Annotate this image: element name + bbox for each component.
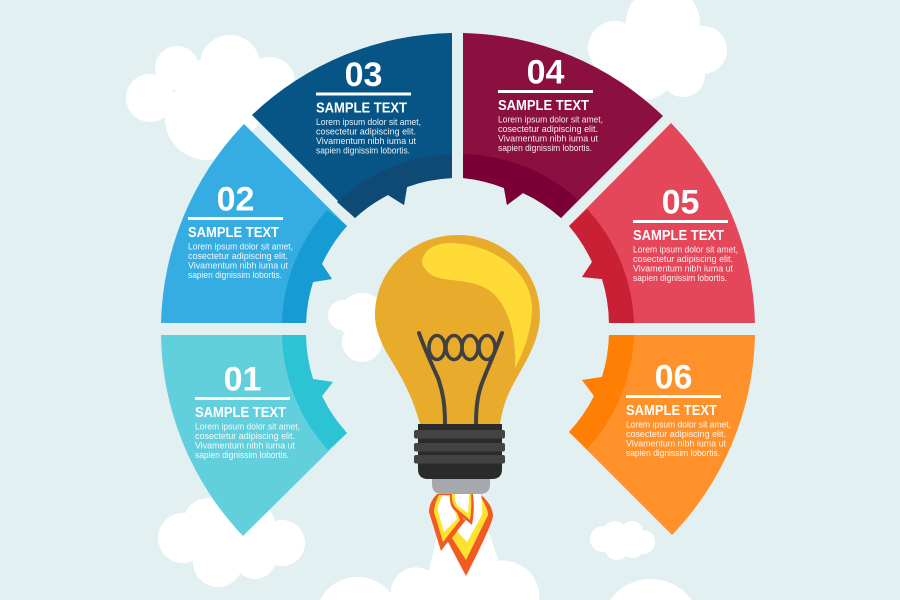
body 04: cosectetur adipiscing elit. — [498, 124, 598, 134]
panel 04 — [463, 33, 663, 218]
cloud: bottom left — [158, 494, 305, 587]
panel 01 — [161, 335, 347, 536]
body 05 — [633, 244, 738, 283]
panel 01 inner band — [282, 335, 347, 450]
panel 06 inner band — [569, 335, 634, 449]
panel 04 shape — [463, 33, 663, 218]
body 04 — [498, 114, 603, 153]
panel 05 inner band — [569, 209, 634, 323]
body 05: sapien dignissim lobortis. — [633, 273, 727, 283]
body 05: Lorem ipsum dolor sit amet, — [633, 244, 738, 254]
cloud: top right — [588, 0, 727, 100]
heading 06: SAMPLE TEXT — [626, 402, 717, 419]
cloud: bottom right — [610, 579, 692, 600]
body 03 — [316, 117, 421, 156]
body 01: sapien dignissim lobortis. — [195, 450, 289, 460]
body 03: Vivamentum nibh iuma ut — [316, 136, 416, 146]
number 06: 06 — [655, 358, 692, 396]
body 03: Lorem ipsum dolor sit amet, — [316, 117, 421, 127]
bulb glass — [375, 235, 540, 424]
heading 05: SAMPLE TEXT — [633, 227, 724, 244]
body 04: Lorem ipsum dolor sit amet, — [498, 114, 603, 124]
panel 01 shape — [161, 335, 347, 536]
right flame — [447, 494, 493, 576]
panel 05 text — [633, 184, 738, 283]
panel 02 — [161, 124, 347, 323]
panel 04 text — [498, 54, 603, 153]
cloud: top left — [126, 35, 295, 160]
panel 04 inner band — [463, 154, 578, 218]
body 06: cosectetur adipiscing elit. — [626, 429, 726, 439]
middle flame — [450, 494, 474, 525]
body 06 — [626, 420, 731, 458]
panel 03 text — [316, 56, 421, 156]
screw ridges — [414, 430, 505, 464]
body 02: Lorem ipsum dolor sit amet, — [188, 242, 293, 252]
nozzle — [432, 478, 490, 494]
panel 03 shape — [252, 33, 452, 218]
heading 03: SAMPLE TEXT — [316, 100, 407, 116]
body 02: sapien dignissim lobortis. — [188, 270, 282, 280]
body 05: cosectetur adipiscing elit. — [633, 254, 733, 264]
panel 02 shape — [161, 124, 347, 323]
filament — [419, 333, 502, 424]
number 04: 04 — [527, 54, 564, 92]
panel 02 inner band — [282, 210, 347, 323]
cloud: bottom centre left mound — [320, 577, 395, 600]
panel 03 — [252, 33, 452, 218]
body 03: cosectetur adipiscing elit. — [316, 126, 416, 136]
body 06: Vivamentum nibh iuma ut — [626, 438, 726, 448]
body 02 — [188, 242, 293, 280]
heading 04: SAMPLE TEXT — [498, 97, 589, 114]
body 06: sapien dignissim lobortis. — [626, 448, 720, 458]
cloud: behind bulb — [328, 293, 386, 362]
body 01: Lorem ipsum dolor sit amet, — [195, 422, 300, 432]
icon: rocket flames — [429, 494, 493, 576]
body 06: Lorem ipsum dolor sit amet, — [626, 420, 731, 430]
body 04: sapien dignissim lobortis. — [498, 143, 592, 153]
body 01: cosectetur adipiscing elit. — [195, 431, 295, 441]
panel 05 — [569, 123, 755, 323]
heading 02: SAMPLE TEXT — [188, 224, 279, 241]
cloud: bottom right small — [590, 521, 655, 560]
bulb highlight — [422, 243, 532, 368]
panel 05 shape — [569, 123, 755, 323]
panel 02 text — [188, 180, 293, 280]
body 03: sapien dignissim lobortis. — [316, 146, 410, 156]
body 04: Vivamentum nibh iuma ut — [498, 134, 598, 144]
screw base — [418, 424, 502, 479]
number 02: 02 — [217, 180, 254, 218]
panel 01 text — [195, 360, 300, 460]
icon: light bulb — [375, 235, 540, 494]
body 02: cosectetur adipiscing elit. — [188, 251, 288, 261]
body 05: Vivamentum nibh iuma ut — [633, 264, 733, 274]
clouds — [126, 0, 727, 600]
panel 06 shape — [569, 335, 755, 535]
cloud: bottom centre right mound — [391, 561, 540, 600]
number 05: 05 — [662, 184, 699, 222]
rocket smoke — [425, 500, 510, 600]
number 03: 03 — [345, 56, 382, 94]
body 02: Vivamentum nibh iuma ut — [188, 260, 288, 270]
panel 06 — [569, 335, 755, 535]
left flame — [429, 494, 464, 551]
number 01: 01 — [224, 360, 261, 398]
body 01 — [195, 422, 300, 460]
body 01: Vivamentum nibh iuma ut — [195, 440, 295, 450]
panel 03 inner band — [337, 154, 452, 218]
panel 06 text — [626, 358, 731, 458]
heading 01: SAMPLE TEXT — [195, 404, 286, 421]
